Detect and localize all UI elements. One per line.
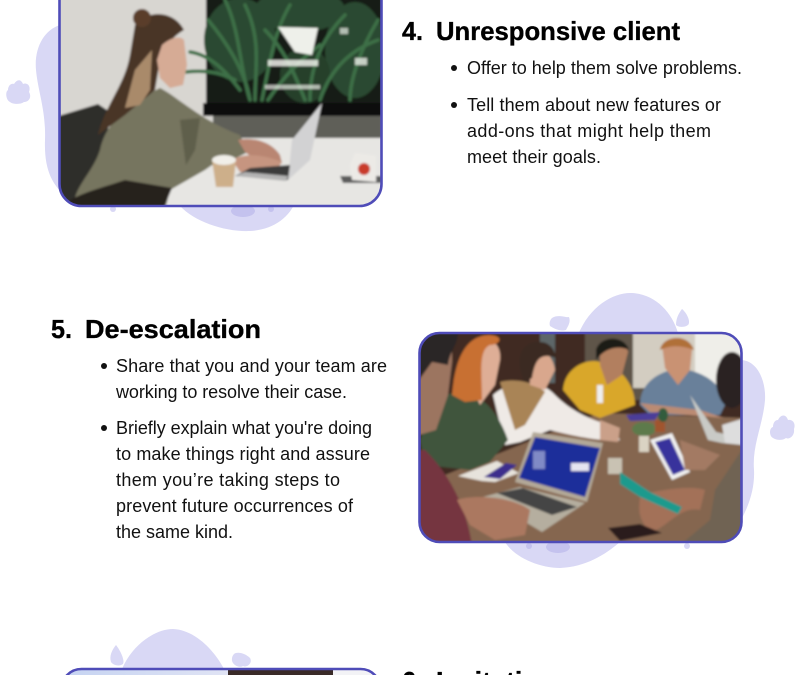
- man in foreground left: [420, 351, 454, 436]
- hair: [98, 14, 184, 135]
- plant and pots: [632, 422, 656, 436]
- bullet list: section 4: meet their goals.: [467, 147, 601, 167]
- hands: [457, 497, 530, 540]
- heading: 5. De-escalation: 5.: [51, 314, 72, 344]
- silver laptop far right: [690, 395, 742, 445]
- bullet list: section 5: [101, 356, 387, 542]
- man in blue shirt: [640, 368, 725, 415]
- bullet list: section 5: the same kind.: [116, 522, 233, 542]
- woman: [74, 88, 248, 210]
- photo: team meeting around a table: [415, 330, 748, 545]
- red haired woman: [420, 393, 508, 470]
- bullet list: section 4: Tell them about new features or: [467, 95, 721, 115]
- right person forearm and shirt: [686, 452, 740, 541]
- plant foliage: [204, 0, 385, 103]
- woman in white: [493, 383, 620, 445]
- bullet list: section 5: working to resolve their case.: [115, 382, 347, 402]
- blob decoration: section 6: [110, 629, 251, 669]
- chair: [60, 103, 110, 202]
- bullet list: section 4: add-ons that might help them: [467, 121, 711, 141]
- tablet on table: [650, 433, 690, 480]
- notebook with phone: [458, 461, 519, 482]
- coffee cup: [212, 160, 236, 187]
- phone: [608, 524, 662, 541]
- photo frame: section 6: [62, 669, 380, 675]
- bullet list: section 4: Offer to help them solve problems.: [467, 58, 742, 78]
- heading: 4. Unresponsive client: 4.: [402, 16, 423, 46]
- bullet list: section 5: them you’re taking steps to: [116, 470, 340, 490]
- photo: section 6 top edge: [69, 670, 372, 675]
- bullet list: section 5: Share that you and your team are: [116, 356, 387, 376]
- purple tablet at table centre: [626, 412, 660, 421]
- heading: 5. De-escalation: De-escalation: [85, 314, 261, 344]
- table: [440, 413, 745, 545]
- heading: 4. Unresponsive client: Unresponsive client: [436, 16, 680, 46]
- green phone case: [620, 472, 682, 514]
- power cube: [340, 176, 382, 183]
- photo frame: section 5: [420, 333, 742, 542]
- laptop: [288, 103, 322, 180]
- bullet list: section 5: Briefly explain what you're doing: [116, 418, 372, 438]
- photo frame: section 4: [60, 0, 382, 206]
- blob decoration: section 5: [505, 293, 795, 568]
- photo: woman working on laptop: [55, 0, 385, 210]
- bullet list: section 5: prevent future occurrences of: [116, 496, 354, 516]
- bullet list: section 4: [451, 58, 742, 167]
- man in yellow jacket: [563, 361, 635, 418]
- blob decoration: section 4: [6, 25, 296, 231]
- foreground laptop: [483, 487, 585, 532]
- bullet list: section 5: to make things right and assure: [116, 444, 370, 464]
